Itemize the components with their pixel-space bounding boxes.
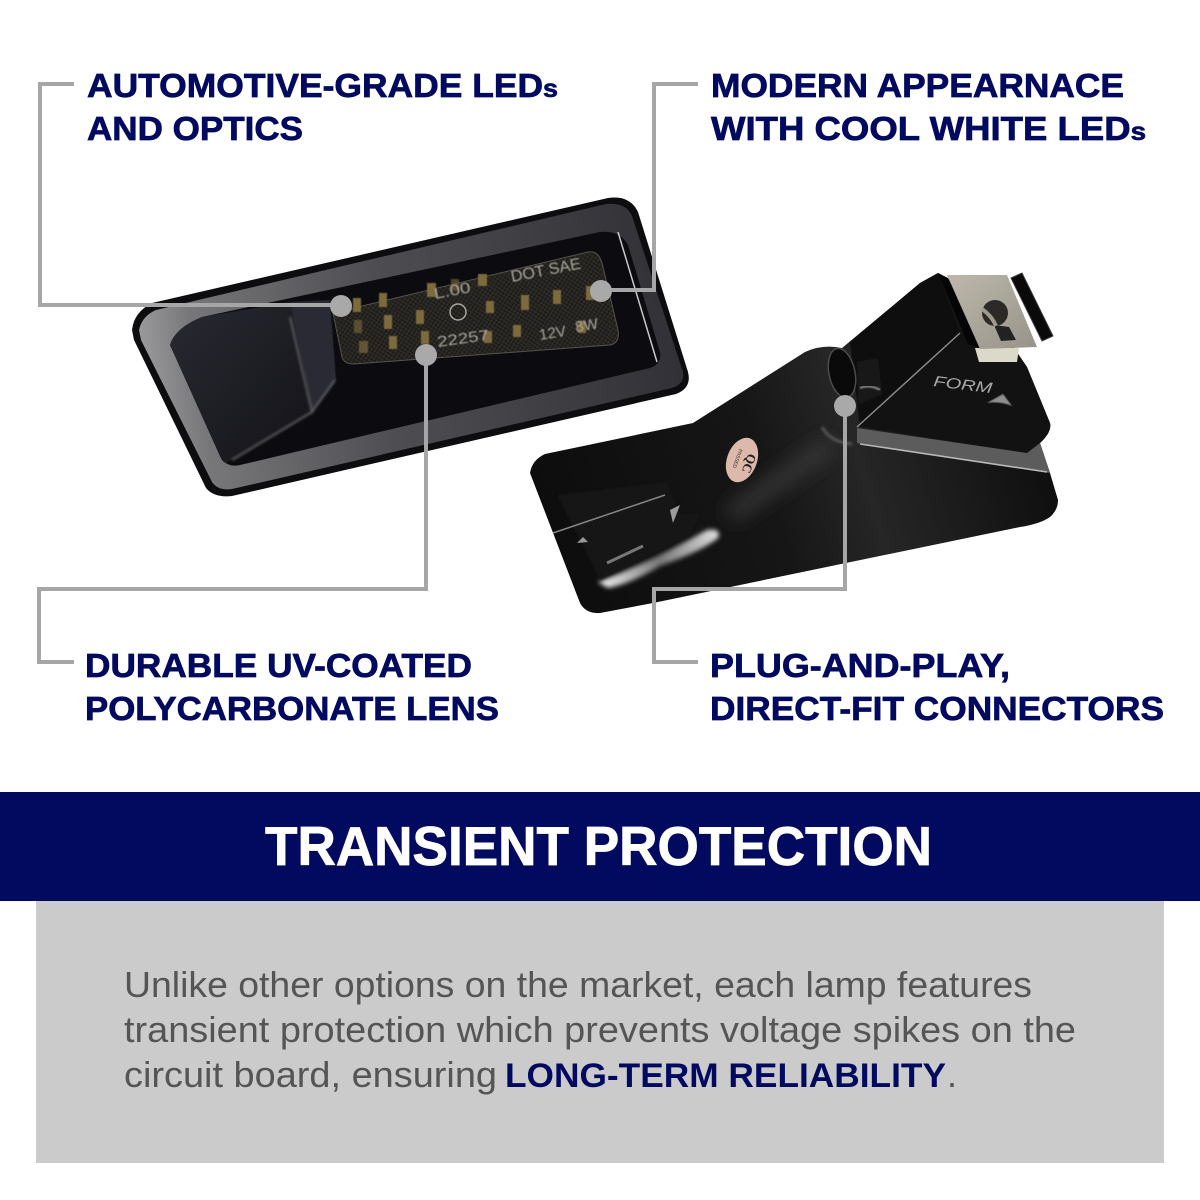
label: modern appearance — [711, 67, 1146, 147]
FORM logo: FORM — [933, 373, 994, 397]
molded detail panel — [553, 482, 700, 580]
callout leader: polycarbonate lens — [39, 344, 437, 662]
label: automotive-grade LEDs and optics: AUTOMOTIVE-GRADE LED s — [87, 67, 558, 104]
lens: DOT SAE — [510, 256, 582, 286]
connector socket — [822, 346, 882, 444]
metal clip — [938, 273, 1053, 362]
description text: LONG-TERM RELIABILITY — [505, 1057, 946, 1095]
label: modern appearance: WITH COOL WHITE LED s — [711, 110, 1146, 147]
right lamp: rear housing — [530, 273, 1058, 613]
connector block — [850, 273, 960, 427]
label: durable lens: POLYCARBONATE LENS — [85, 690, 499, 727]
panel: description background — [36, 901, 1164, 1163]
lens: 12V — [538, 323, 567, 344]
description text: circuit board, ensuring — [124, 1054, 497, 1095]
callout leader: LEDs and optics — [40, 84, 352, 317]
lens — [333, 252, 618, 364]
label: connectors: PLUG-AND-PLAY, — [710, 647, 1010, 684]
recess — [170, 232, 660, 466]
description text — [124, 964, 1076, 1095]
left lamp: lit face — [132, 198, 689, 496]
molded pocket — [170, 300, 336, 463]
silver strip — [857, 428, 1050, 473]
label: connectors: DIRECT-FIT CONNECTORS — [710, 690, 1164, 727]
heading: transient protection: TRANSIENT PROTECTION — [265, 815, 932, 877]
label: durable lens — [85, 647, 499, 727]
callout leader: cool white LEDs — [590, 84, 698, 302]
label: automotive-grade LEDs and optics — [87, 67, 558, 147]
QC sticker: QC — [739, 452, 760, 475]
label: connectors — [710, 647, 1164, 727]
QC sticker — [720, 433, 764, 487]
label: modern appearance: MODERN APPEARNACE — [711, 67, 1124, 104]
banner — [0, 792, 1200, 901]
surface highlights — [730, 445, 830, 515]
lens: 22257 — [436, 327, 490, 351]
label: automotive-grade LEDs and optics: AND OPTICS — [87, 110, 303, 147]
description text: Unlike other options on the market, each lamp features — [124, 964, 1032, 1005]
label: durable lens: DURABLE UV-COATED — [85, 647, 472, 684]
description text: . — [947, 1054, 957, 1095]
description text: transient protection which prevents voltage spikes on the — [124, 1009, 1076, 1050]
lens: 8W — [574, 315, 600, 336]
lens: L.00 — [433, 279, 472, 303]
QC sticker: PASSED — [731, 448, 743, 469]
callout leader: connectors — [654, 395, 856, 662]
